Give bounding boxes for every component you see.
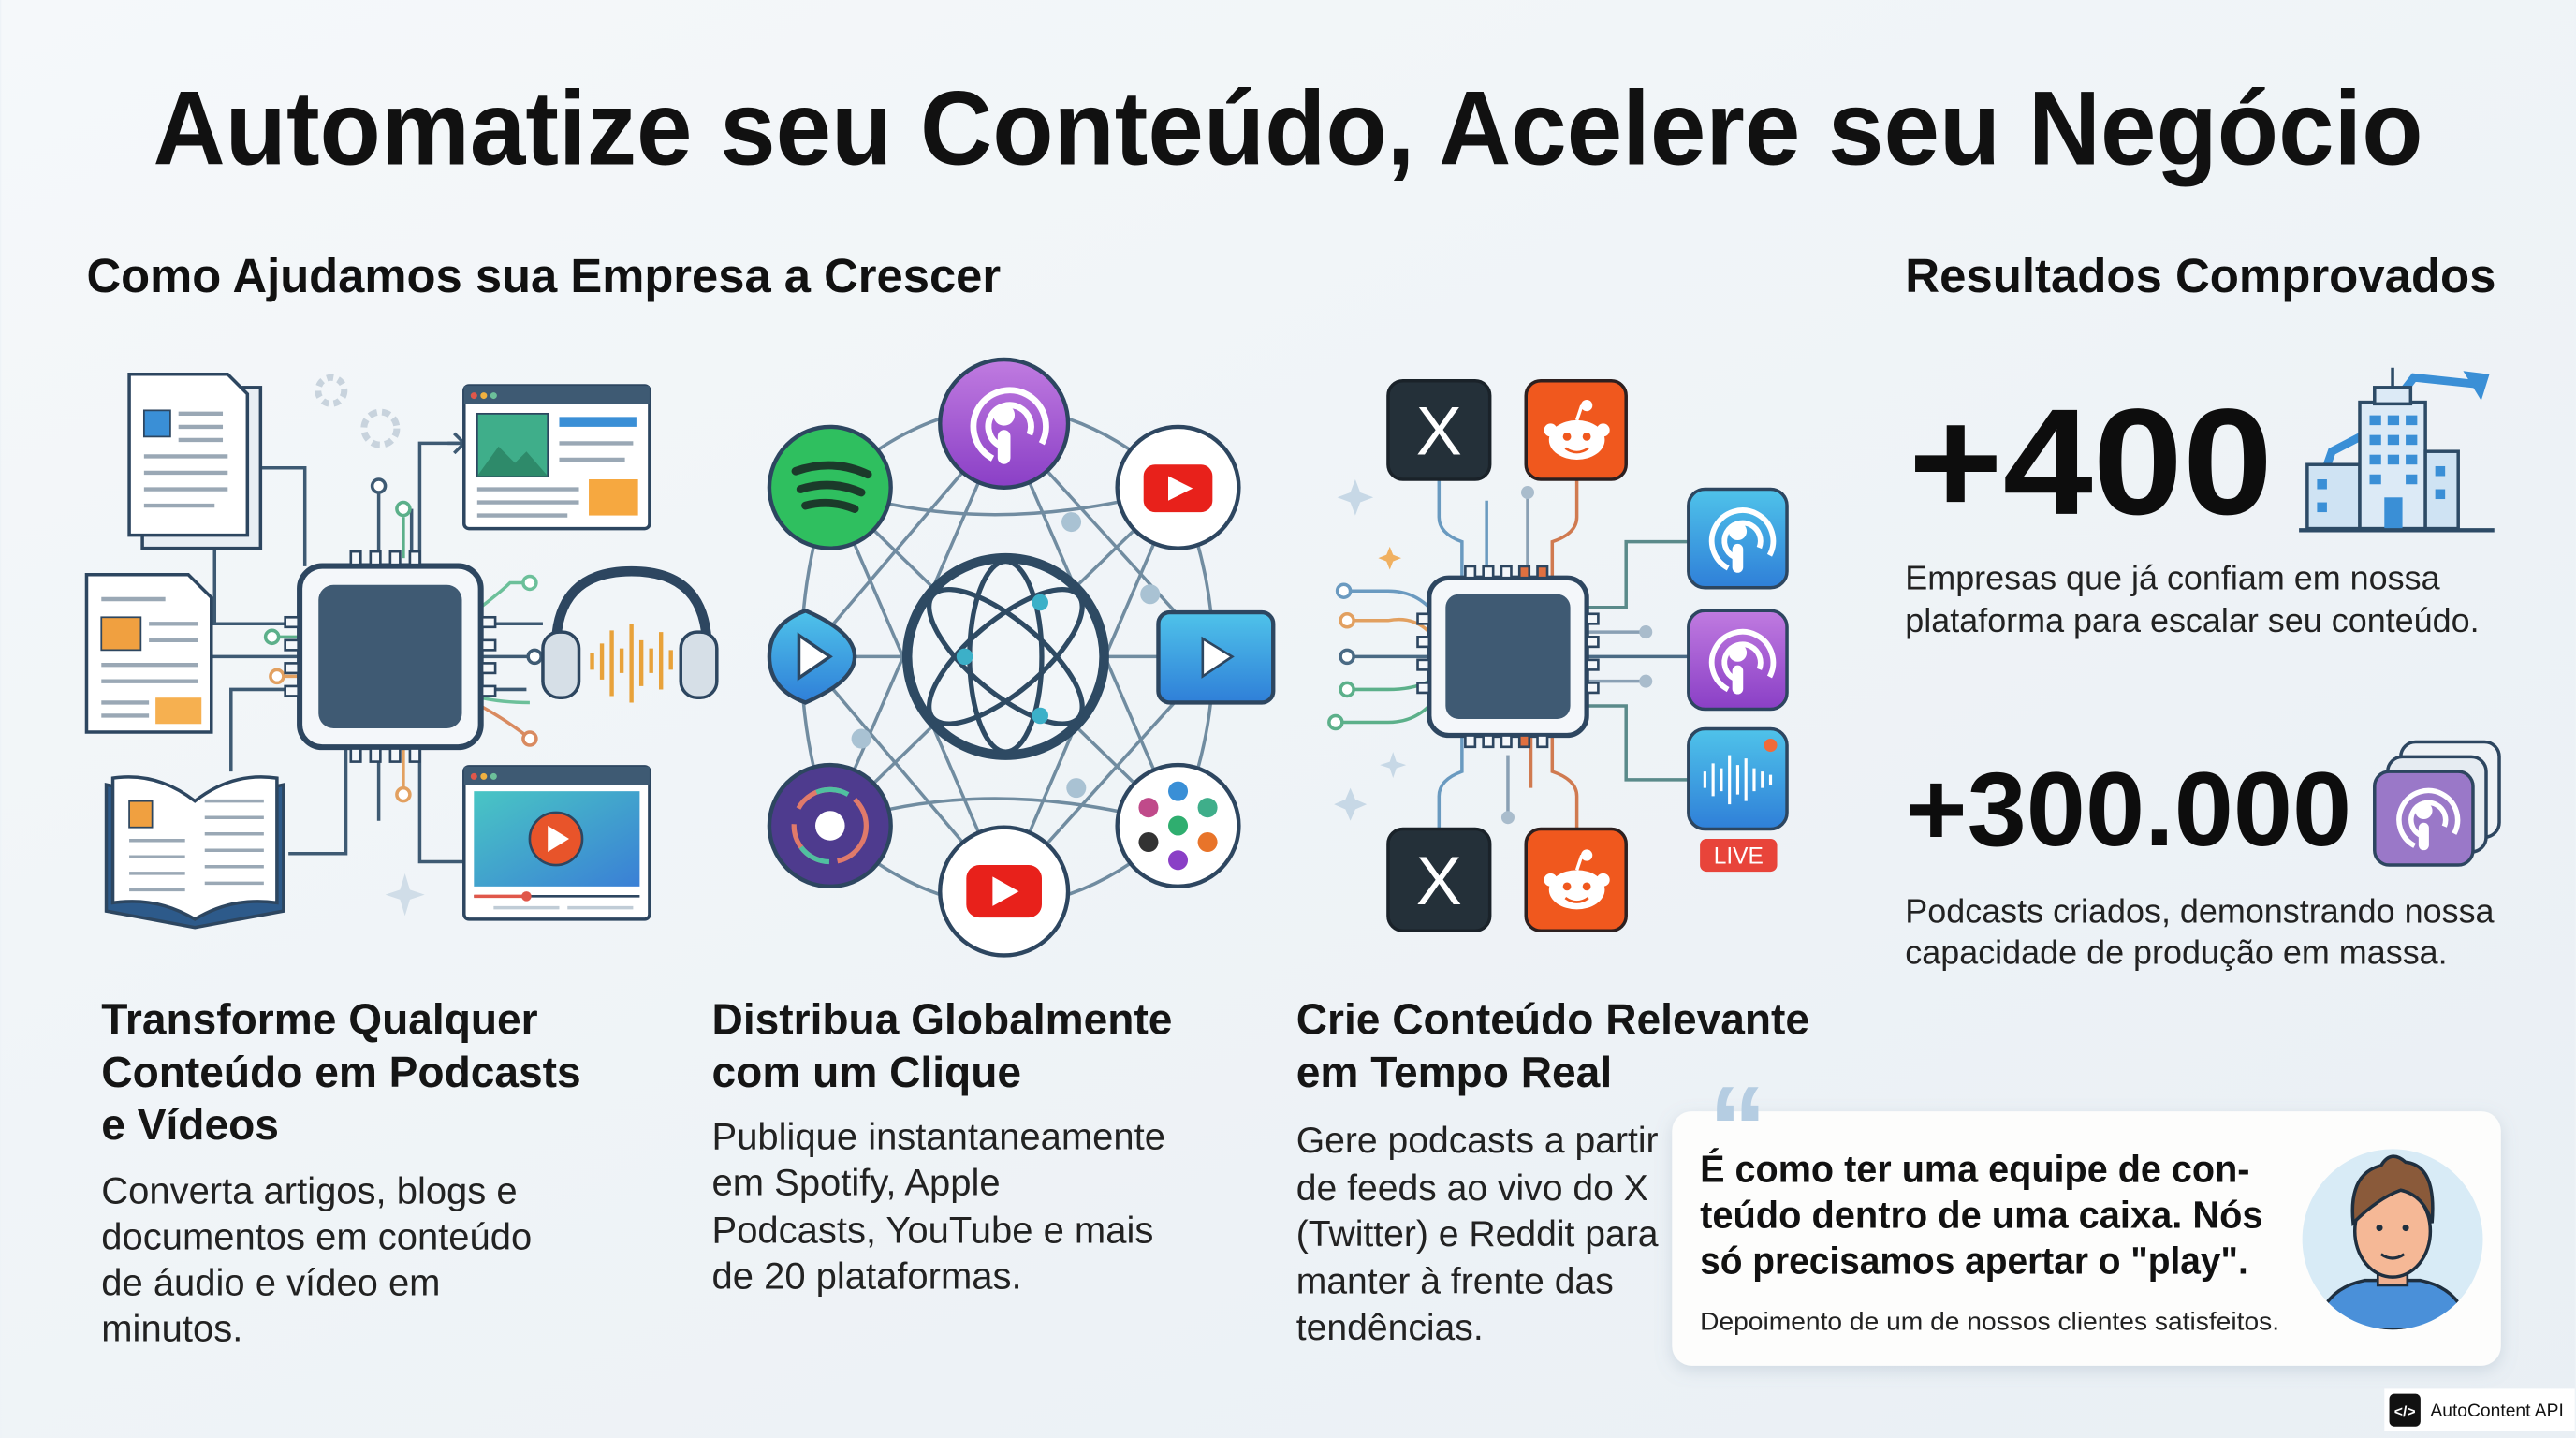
- illustration: global distribution network: [769, 360, 1273, 955]
- icon: quote mark: “: [1708, 1062, 1767, 1194]
- icon: podcast stack: [2375, 742, 2499, 865]
- illustration: real-time feeds chip: [1329, 381, 1787, 931]
- icon: X top: X: [1416, 392, 1462, 470]
- icon: video app: [1158, 612, 1273, 702]
- heading: como ajudamos: Como Ajudamos sua Empresa a Crescer: [86, 249, 1001, 302]
- icon: live waveform: [1689, 729, 1787, 872]
- icon: headphones: [543, 571, 717, 702]
- text block: column 3: tendências.: [1296, 1308, 1484, 1348]
- text block: column 1: [101, 995, 581, 1350]
- icon: building with growth arrow: [2299, 368, 2495, 530]
- logo badge: AutoContent API: [2430, 1401, 2564, 1421]
- icon: podcast blue: [1689, 490, 1787, 588]
- stat: +300.000: +300.000: [1905, 750, 2351, 868]
- text block: column 1: Transforme Qualquer: [101, 995, 538, 1044]
- stat: +400: [1905, 378, 2480, 639]
- icon: podcast purple: [1689, 610, 1787, 709]
- icon: blue play: [769, 610, 855, 702]
- text block: column 1: Converta artigos, blogs e: [101, 1170, 518, 1211]
- icon: browser video: [464, 767, 650, 919]
- stat: +400: plataforma para escalar seu conteúdo.: [1905, 601, 2480, 639]
- text block: column 2: em Spotify, Apple: [712, 1162, 1001, 1203]
- text block: column 3: de feeds ao vivo do X: [1296, 1168, 1648, 1209]
- icon: open book: [107, 777, 284, 928]
- stat: +400: Empresas que já confiam em nossa: [1905, 558, 2440, 596]
- stat: +400: +400: [1909, 378, 2273, 547]
- heading: resultados: Resultados Comprovados: [1905, 249, 2496, 302]
- icon: X bottom: [1388, 829, 1490, 931]
- text block: column 1: e Vídeos: [101, 1100, 279, 1149]
- text block: column 3: manter à frente das: [1296, 1262, 1614, 1302]
- icon: gears: [318, 377, 397, 445]
- text block: column 2: [712, 995, 1172, 1297]
- stat: +300.000: Podcasts criados, demonstrando nossa: [1905, 891, 2495, 930]
- text block: column 3: (Twitter) e Reddit para: [1296, 1214, 1659, 1255]
- icon: document 2: [86, 575, 212, 732]
- text block: column 3: [1296, 995, 1809, 1348]
- logo badge: [2384, 1388, 2575, 1431]
- stat: +300.000: capacidade de produção em massa.: [1905, 932, 2448, 971]
- text block: column 3: Gere podcasts a partir: [1296, 1121, 1659, 1161]
- text block: column 1: Conteúdo em Podcasts: [101, 1048, 581, 1096]
- text block: column 3: em Tempo Real: [1296, 1048, 1612, 1096]
- icon: avatar: [2303, 1149, 2482, 1329]
- text block: column 2: Podcasts, YouTube e mais: [712, 1210, 1153, 1251]
- text block: column 3: Crie Conteúdo Relevante: [1296, 995, 1809, 1044]
- quote card: É como ter uma equipe de con-: [1700, 1147, 2250, 1190]
- stat: +300.000: [1905, 750, 2495, 971]
- icon: document 1: [129, 374, 260, 549]
- icon: youtube bottom: [940, 828, 1068, 955]
- icon: X bottom: X: [1416, 842, 1462, 919]
- icon: browser article: [464, 386, 650, 529]
- logo badge: </>: [2394, 1404, 2416, 1420]
- icon: spotify: [769, 427, 891, 549]
- text block: column 2: de 20 plataformas.: [712, 1255, 1022, 1297]
- text block: column 2: com um Clique: [712, 1048, 1021, 1096]
- icon: purple swirl app: [769, 765, 891, 887]
- icon: globe: [907, 558, 1105, 756]
- quote card: teúdo dentro de uma caixa. Nós: [1700, 1194, 2263, 1237]
- text block: column 1: documentos em conteúdo: [101, 1216, 532, 1257]
- title: Automatize seu Conteúdo, Acelere seu Negócio: [154, 68, 2422, 186]
- icon: multi-app cluster: [1118, 765, 1238, 887]
- text block: column 2: Publique instantaneamente: [712, 1116, 1165, 1157]
- quote card: [1672, 1062, 2501, 1366]
- text block: column 1: de áudio e vídeo em: [101, 1262, 440, 1303]
- quote card: só precisamos apertar o "play".: [1700, 1240, 2248, 1283]
- quote card: Depoimento de um de nossos clientes satisfeitos.: [1700, 1306, 2279, 1335]
- text block: column 1: minutos.: [101, 1309, 242, 1350]
- icon: apple podcasts: [940, 360, 1068, 488]
- illustration: content to podcast chip: [86, 374, 717, 928]
- text block: column 2: Distribua Globalmente: [712, 995, 1172, 1044]
- icon: live waveform: LIVE: [1714, 844, 1764, 869]
- icon: reddit bottom: [1526, 829, 1626, 931]
- icon: X top: [1388, 381, 1490, 479]
- icon: reddit top: [1526, 381, 1626, 479]
- icon: youtube top: [1118, 427, 1238, 549]
